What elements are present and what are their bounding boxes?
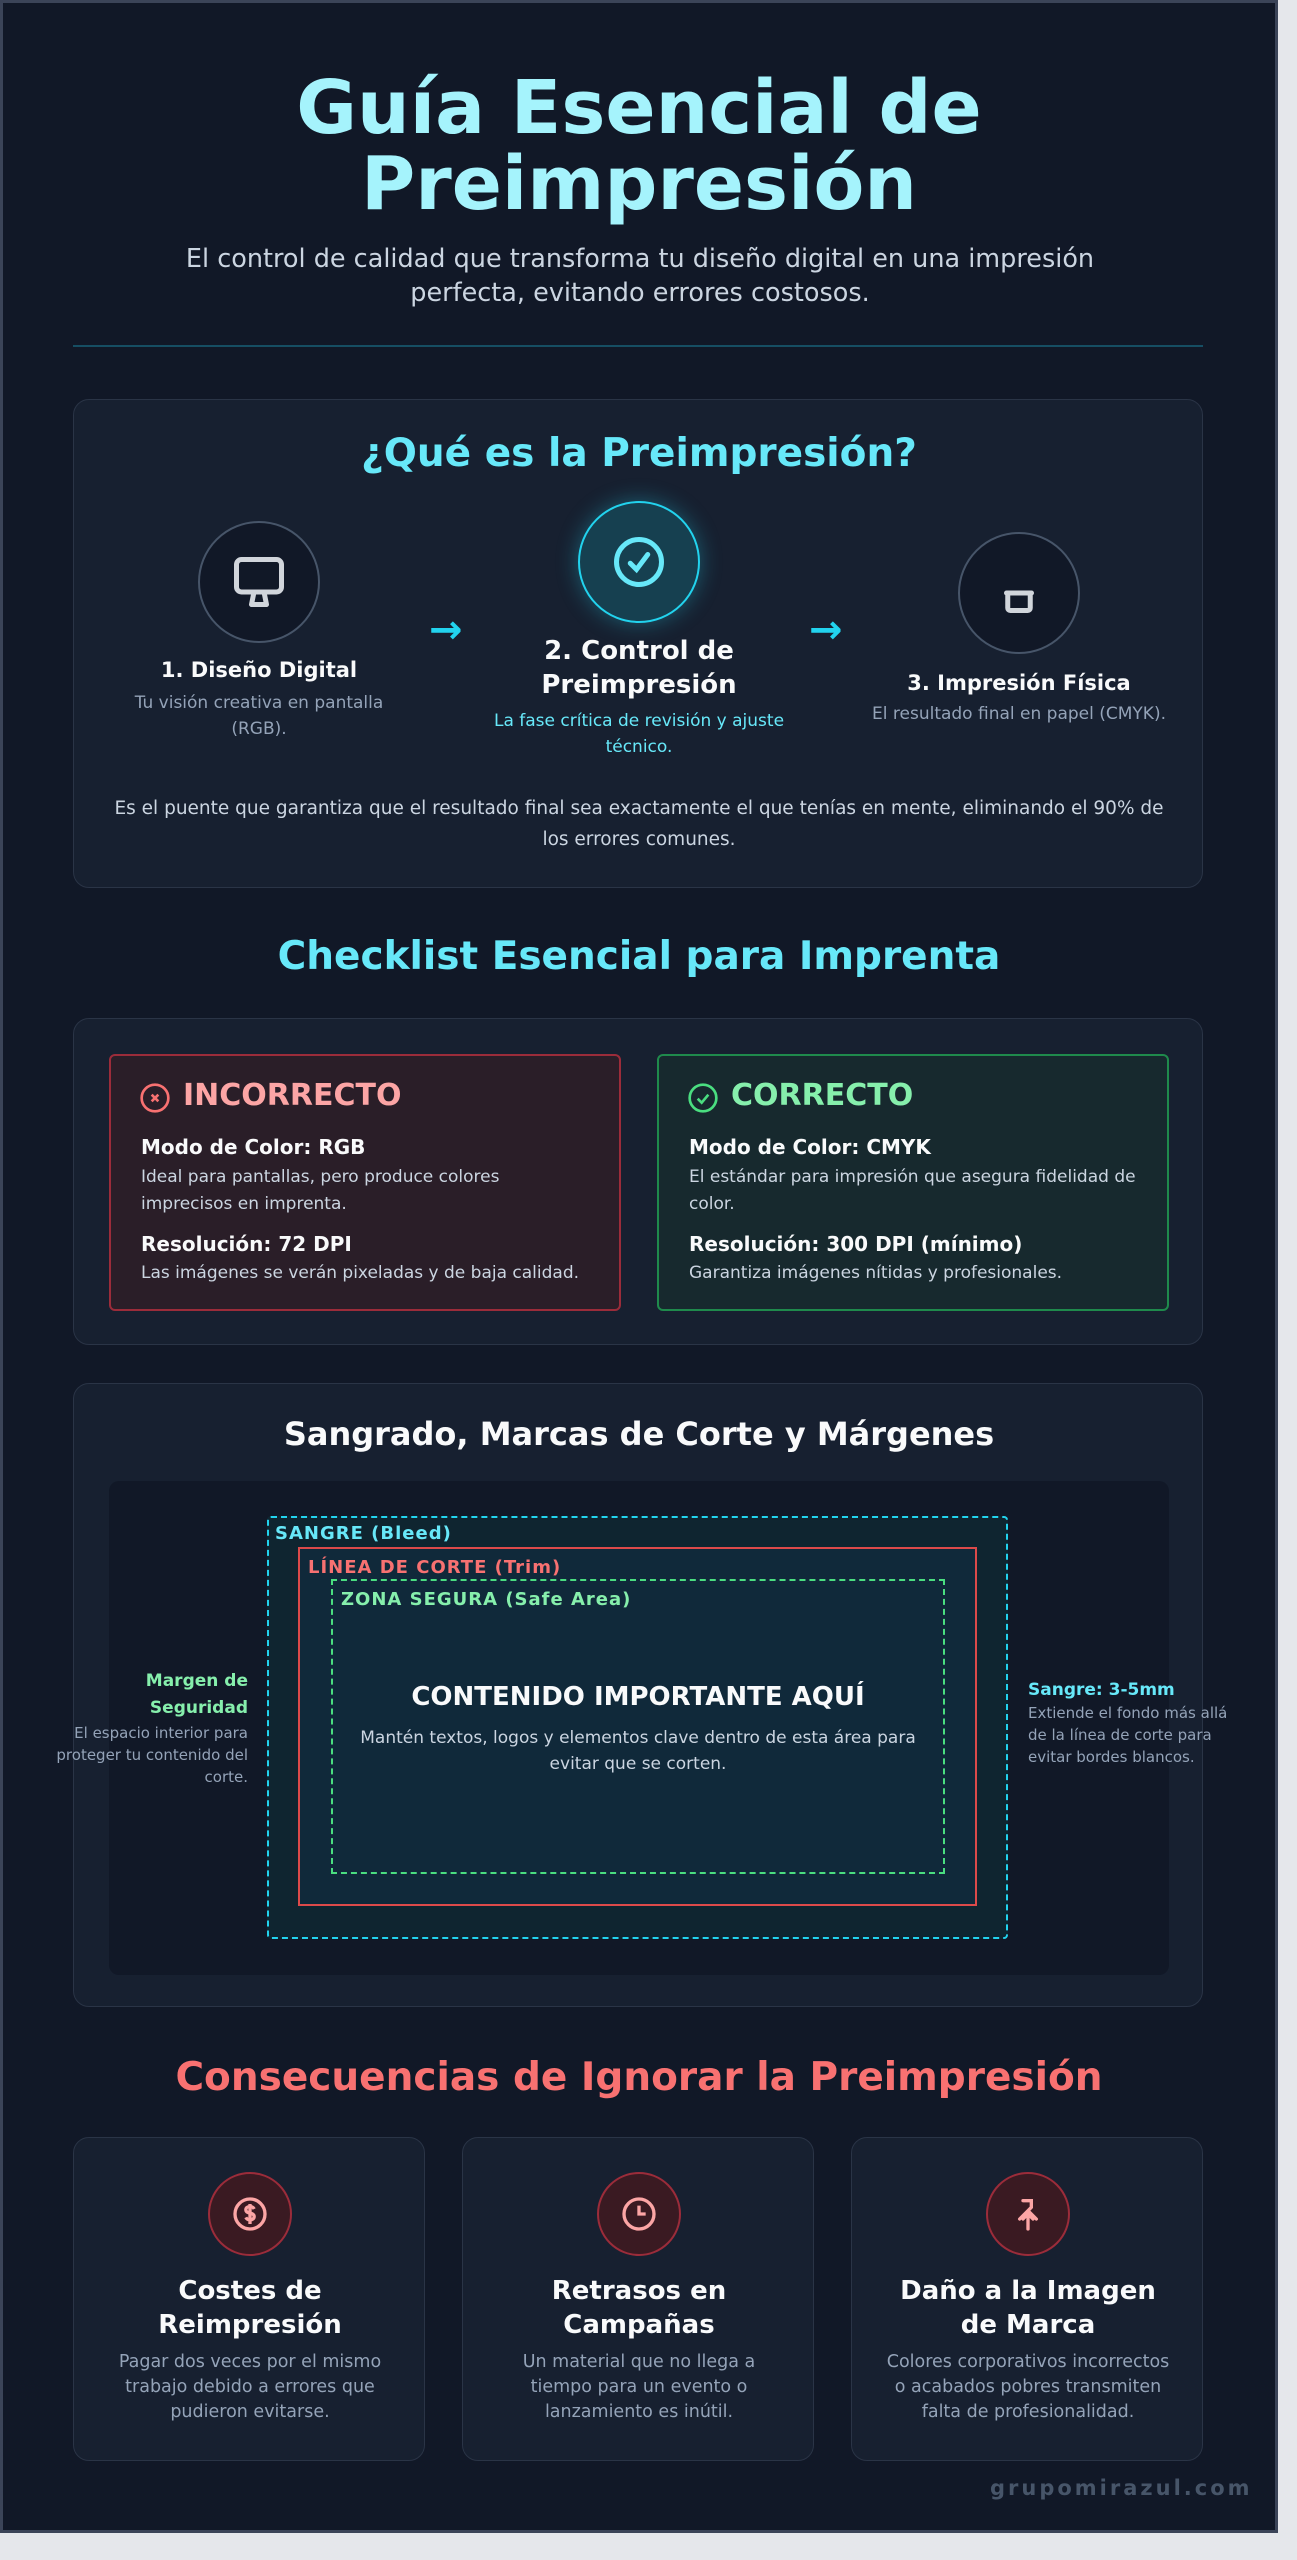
card: reprint costs: Pagar dos veces por el mismo trabajo debido a errores que pudieron evitarse. xyxy=(119,2352,381,2422)
label: safety margin: El espacio interior para proteger tu contenido del corte. xyxy=(56,1724,248,1786)
icon: dollar xyxy=(208,2172,292,2256)
diagram: trim line: LÍNEA DE CORTE (Trim) xyxy=(308,1557,561,1578)
card: correct: CORRECTO xyxy=(731,1078,913,1113)
card: reprint costs xyxy=(73,2137,425,2461)
card: delays: Un material que no llega a tiempo para un evento o lanzamiento es inútil. xyxy=(523,2352,755,2422)
diagram: safe area xyxy=(331,1579,945,1874)
content text: CONTENIDO IMPORTANTE AQUÍ xyxy=(411,1682,865,1712)
card: delays xyxy=(462,2137,814,2461)
card: delays: Retrasos en xyxy=(552,2276,726,2306)
icon: check circle xyxy=(688,1083,718,1113)
card: brand damage: Colores corporativos incorrectos o acabados pobres transmiten falta de profesionalidad. xyxy=(887,2352,1169,2422)
card: incorrect: Modo de Color: RGB xyxy=(141,1135,365,1159)
card: incorrect: Las imágenes se verán pixeladas y de baja calidad. xyxy=(141,1263,579,1283)
card: correct: Modo de Color: CMYK xyxy=(689,1135,931,1159)
card: correct xyxy=(657,1054,1169,1311)
footer: brand: grupomirazul.com xyxy=(990,2476,1253,2500)
label: bleed size: Extiende el fondo más allá de la línea de corte para evitar bordes blancos. xyxy=(1028,1704,1227,1766)
card: correct: Resolución: 300 DPI (mínimo) xyxy=(689,1232,1022,1256)
step 2 xyxy=(494,490,784,757)
card: reprint costs: Costes de xyxy=(178,2276,322,2306)
icon: broken xyxy=(986,2172,1070,2256)
diagram: bleed box: SANGRE (Bleed) xyxy=(275,1523,452,1544)
arrow: → xyxy=(429,607,463,653)
card: incorrect: Ideal para pantallas, pero produce colores imprecisos en imprenta. xyxy=(141,1167,499,1214)
subtitle: El control de calidad que transforma tu diseño digital en una impresión perfecta, evitando errores costosos. xyxy=(186,244,1094,308)
card: correct: Garantiza imágenes nítidas y profesionales. xyxy=(689,1263,1062,1283)
step 1 xyxy=(134,521,383,739)
step 1: Tu visión creativa en pantalla (RGB). xyxy=(135,693,383,739)
step 2: La fase crítica de revisión y ajuste técnico. xyxy=(494,711,784,757)
label: bleed size: Sangre: 3-5mm xyxy=(1028,1680,1175,1700)
card: reprint costs: Reimpresión xyxy=(158,2310,342,2340)
panel: bleed diagram xyxy=(73,1383,1203,2007)
step 2: Preimpresión xyxy=(541,670,737,700)
card: incorrect: Resolución: 72 DPI xyxy=(141,1232,352,1256)
icon: x circle xyxy=(140,1083,170,1113)
step 2: 2. Control de xyxy=(544,636,734,666)
panel: what is prepress xyxy=(73,399,1203,888)
card: delays: Campañas xyxy=(563,2310,715,2340)
arrow: → xyxy=(809,607,843,653)
step 3: 3. Impresión Física xyxy=(907,671,1131,695)
diagram area xyxy=(109,1481,1169,1975)
heading: ¿Qué es la Preimpresión? xyxy=(361,431,917,476)
title: Guía Esencial de xyxy=(296,65,982,151)
card: brand damage: de Marca xyxy=(961,2310,1095,2340)
icon: paper xyxy=(958,532,1080,654)
diagram: safe area: Mantén textos, logos y elementos clave dentro de esta área para evitar que se corten. xyxy=(360,1728,916,1774)
diagram: safe area: ZONA SEGURA (Safe Area) xyxy=(341,1589,631,1610)
card: correct: El estándar para impresión que asegura fidelidad de color. xyxy=(689,1167,1136,1214)
icon: monitor xyxy=(198,521,320,643)
diagram: bleed box xyxy=(267,1516,1008,1939)
card: incorrect: INCORRECTO xyxy=(183,1078,401,1113)
panel: checklist xyxy=(73,1018,1203,1345)
diagram: trim line xyxy=(298,1547,977,1906)
icon: check circle xyxy=(578,501,700,623)
icon: clock xyxy=(597,2172,681,2256)
label: safety margin: Margen de xyxy=(146,1671,248,1691)
title xyxy=(296,65,982,227)
heading: checklist: Checklist Esencial para Imprenta xyxy=(278,934,1000,979)
heading: consequences: Consecuencias de Ignorar la Preimpresión xyxy=(175,2055,1103,2100)
card: brand damage: Daño a la Imagen xyxy=(900,2276,1156,2306)
label: safety margin: Seguridad xyxy=(150,1698,248,1718)
summary text: Es el puente que garantiza que el resultado final sea exactamente el que tenías en mente, eliminando el 90% de los errores comunes. xyxy=(114,798,1164,850)
card: brand damage xyxy=(851,2137,1203,2461)
heading: Sangrado, Marcas de Corte y Márgenes xyxy=(284,1415,994,1453)
label: safety margin xyxy=(56,1671,248,1786)
title: Preimpresión xyxy=(361,141,917,227)
card: incorrect xyxy=(109,1054,621,1311)
step 3: El resultado final en papel (CMYK). xyxy=(872,704,1166,724)
step 1: 1. Diseño Digital xyxy=(161,658,357,682)
step 3 xyxy=(872,532,1166,724)
